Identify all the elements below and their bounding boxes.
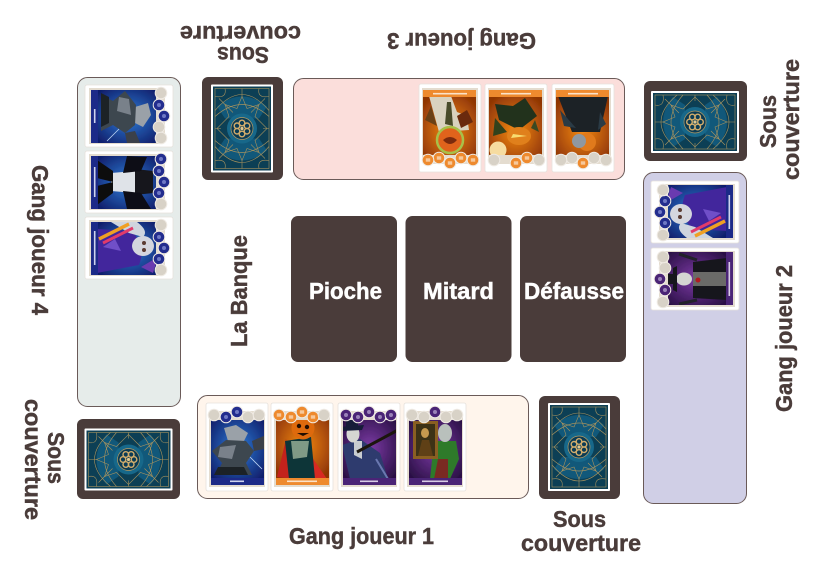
card: gang 1, painting thief (404, 403, 466, 491)
label: sous couverture, top left: couverture (180, 21, 301, 47)
zone: défausse: Défausse (524, 278, 624, 304)
label: sous couverture, bottom left: couverture (20, 399, 46, 520)
panel: gang joueur 1 (198, 396, 528, 498)
face-down pile: top right (644, 81, 747, 161)
panel: gang joueur 2 (644, 172, 746, 504)
card: gang 4, hooded figure (85, 217, 173, 279)
card: gang 1, skeleton gangster (338, 403, 400, 491)
panel: gang joueur 3 (294, 78, 624, 180)
label: sous couverture, bottom (521, 506, 641, 556)
card: gang 1, wolf (206, 403, 268, 491)
label: sous couverture, top left: Sous (217, 42, 269, 68)
card: gang 2, hooded figure (651, 181, 739, 243)
label: sous couverture, bottom left: Sous (43, 432, 69, 484)
label: sous couverture, bottom: Sous (553, 506, 606, 532)
zone: mitard (406, 216, 512, 362)
card: gang 3, pumpkin one (419, 84, 481, 172)
card: gang 4, panther (85, 151, 173, 213)
label: sous couverture, top right: Sous (755, 95, 781, 148)
card: gang 3, pumpkin three (552, 84, 614, 172)
label: la banque: La Banque (226, 235, 252, 347)
face-down pile: top left (202, 77, 283, 180)
face-down pile: bottom left (77, 419, 180, 499)
label: gang joueur 3: Gang joueur 3 (387, 28, 536, 54)
label: sous couverture, top right (755, 59, 804, 180)
label: gang joueur 1: Gang joueur 1 (289, 523, 434, 549)
card: gang 4, wolf (85, 85, 173, 147)
card: gang 2, gangster (651, 248, 739, 310)
zone: mitard: Mitard (423, 278, 494, 304)
label: sous couverture, bottom: couverture (521, 530, 641, 556)
label: sous couverture, top left (180, 21, 301, 68)
label: gang joueur 2: Gang joueur 2 (771, 265, 797, 412)
zone: pioche (291, 216, 397, 362)
label: gang joueur 4: Gang joueur 4 (27, 165, 53, 315)
zone: défausse (520, 216, 626, 362)
label: sous couverture, top right: couverture (778, 59, 804, 180)
label: sous couverture, bottom left (20, 399, 69, 520)
card: gang 3, pumpkin two (485, 84, 547, 172)
card: gang 1, pumpkin head (271, 403, 333, 491)
zone: pioche: Pioche (309, 278, 382, 304)
face-down pile: bottom (539, 396, 620, 499)
panel: gang joueur 4 (78, 78, 180, 406)
